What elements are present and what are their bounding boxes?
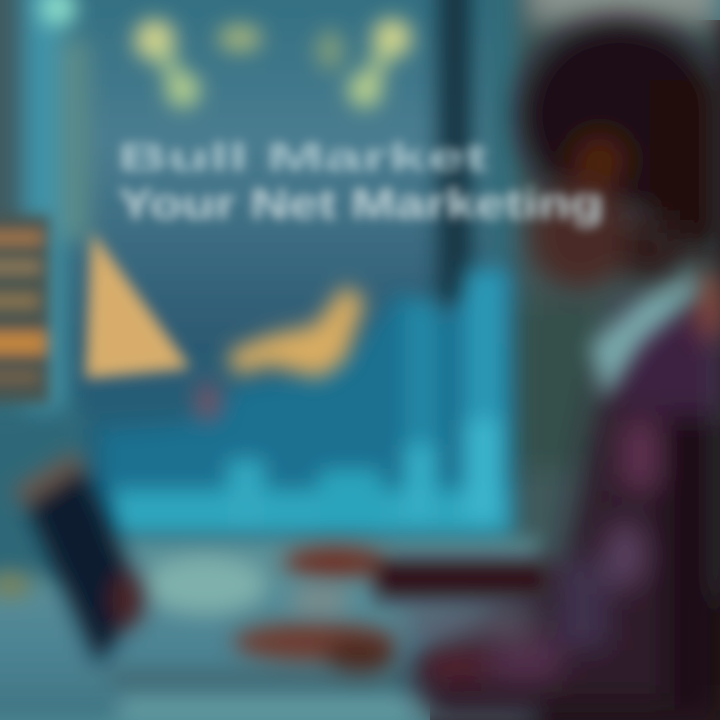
icon: glowing yellow nodes <box>40 0 411 107</box>
chart: yellow area <box>194 285 365 422</box>
stacked books <box>0 215 50 405</box>
person: collar <box>590 265 700 400</box>
edge base: lower right shirt <box>430 685 720 720</box>
desk <box>0 410 540 720</box>
chart: orange triangle <box>86 232 190 378</box>
person: face <box>528 132 680 290</box>
left wall column <box>0 0 90 480</box>
edge base: right side <box>690 20 720 685</box>
window panel <box>70 0 520 540</box>
tablet <box>0 450 145 665</box>
person: shirt <box>410 290 720 720</box>
right wall <box>510 0 720 600</box>
person: hair <box>520 20 720 250</box>
dark window mullion <box>438 0 512 310</box>
headline text: Bull Market <box>118 137 489 179</box>
headline text <box>118 137 603 227</box>
shirt highlights <box>405 275 720 680</box>
chart: teal area <box>100 265 512 535</box>
headline text: Your Net Marketing <box>118 180 603 227</box>
hands <box>233 546 550 673</box>
edge base: bottom desk <box>0 690 430 720</box>
